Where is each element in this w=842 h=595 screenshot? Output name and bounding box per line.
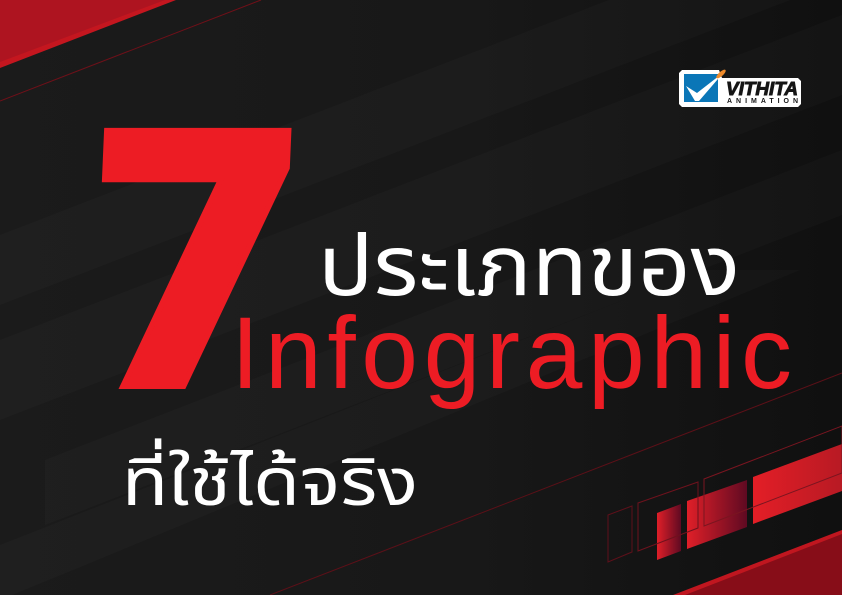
solid red parallelogram large <box>753 444 842 524</box>
top-left thin line <box>0 0 261 101</box>
top-left red band <box>0 0 176 68</box>
gradient parallelogram small <box>657 504 681 560</box>
outline parallelogram left <box>608 506 632 562</box>
logo tagline: ANIMATION <box>727 98 798 105</box>
outline parallelogram right <box>704 426 842 526</box>
decorative parallelograms <box>608 426 842 562</box>
gradient parallelogram medium <box>687 480 747 549</box>
heading line 3: ที่ใช้ได้จริง <box>122 438 418 519</box>
big numeral 7: 7 <box>70 62 318 469</box>
heading line 2: Infographic <box>231 296 792 410</box>
bottom-right thin line <box>270 373 842 595</box>
heading line 1: ประเภทของ <box>318 219 740 313</box>
logo wordmark: VITHITA <box>726 79 798 99</box>
logo: Vithita Animation <box>679 68 801 107</box>
outline parallelogram middle <box>638 482 698 551</box>
logo blue box with check <box>684 68 727 102</box>
bottom-right red band <box>673 530 842 595</box>
logo white plate <box>679 70 801 107</box>
